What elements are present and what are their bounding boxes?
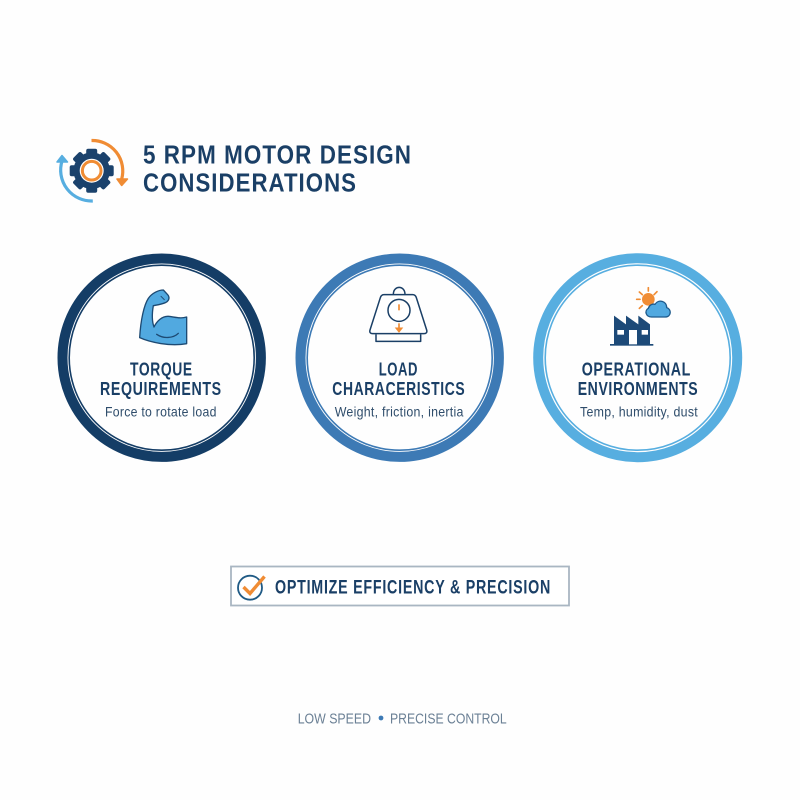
heading: OPERATIONAL [582, 359, 691, 380]
heading: LOAD [379, 359, 418, 380]
badge rings [62, 258, 261, 457]
heading [578, 359, 698, 399]
heading [100, 359, 222, 399]
heading: TORQUE [130, 359, 193, 380]
panel: operational environments [538, 258, 737, 457]
icon: gear with rotation arrows [57, 140, 128, 201]
title: 5 RPM MOTOR DESIGN [143, 142, 412, 170]
footer tagline: LOW SPEED [298, 710, 371, 727]
icon: factory with sun and cloud [610, 288, 670, 346]
header [57, 140, 412, 201]
badge rings [538, 258, 737, 457]
panel: load characteristics [300, 258, 499, 457]
icon: check mark [238, 576, 264, 600]
title [143, 142, 412, 198]
heading: CHARACERISTICS [332, 378, 465, 399]
callout: optimize banner [231, 566, 569, 606]
footer tagline [298, 710, 507, 727]
callout text: OPTIMIZE EFFICIENCY & PRECISION [275, 577, 551, 598]
panel: torque requirements [62, 258, 261, 457]
description: Temp, humidity, dust [580, 404, 698, 420]
description: Force to rotate load [105, 404, 217, 420]
footer tagline: PRECISE CONTROL [390, 710, 507, 727]
heading: REQUIREMENTS [100, 378, 222, 399]
icon: weight scale [370, 287, 427, 341]
icon: flexed arm [140, 290, 187, 345]
title: CONSIDERATIONS [143, 170, 357, 198]
heading: ENVIRONMENTS [578, 378, 698, 399]
description: Weight, friction, inertia [335, 404, 464, 420]
badge rings [300, 258, 499, 457]
heading [332, 359, 465, 399]
